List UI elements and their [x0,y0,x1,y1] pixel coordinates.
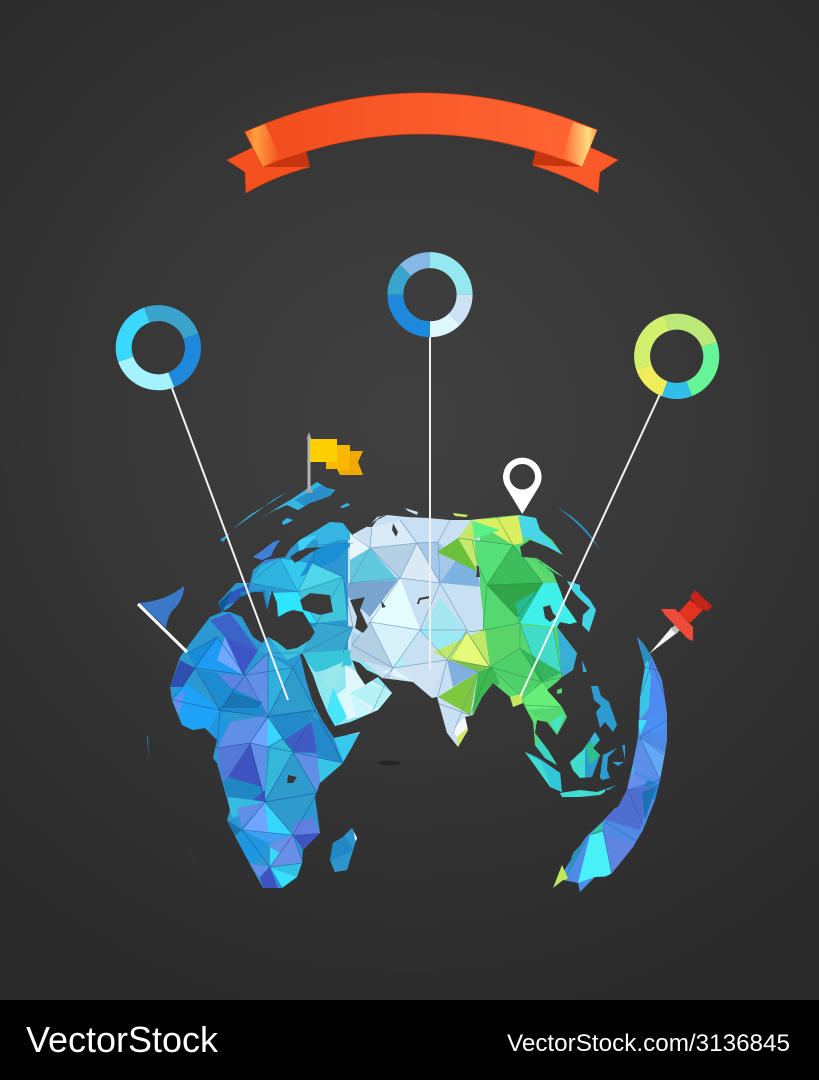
footer bar [0,1000,819,1080]
ribbon right tail [532,145,618,193]
Europe and Greenland facets [215,480,355,672]
icon: yellow flag [306,432,363,493]
icon: white map pin [503,458,542,514]
islands and Australia facets [525,635,668,888]
ground shadow [378,760,400,766]
red ribbon banner [227,93,618,193]
sliver: northeast arc [558,508,600,550]
leader line: right donut [520,392,661,697]
donut chart: centre [381,246,479,344]
low-poly world map [150,480,680,900]
footer image id: VectorStock.com/3136845 [507,1030,790,1057]
ribbon main band [245,93,597,167]
sliver: southwest arc [186,848,198,865]
leader line: centre donut [429,336,431,670]
sliver: west arc [147,736,149,760]
ribbon left tail [227,145,310,193]
donut chart: left [113,303,203,393]
icon: blue pennant flag [138,586,187,652]
globe mesh lines [172,517,667,888]
ribbon right shine [563,122,597,167]
central Asia pale facets [347,520,483,737]
ribbon left shine [245,124,280,167]
Africa facets [170,613,360,888]
Arabia facets [320,662,392,727]
ribbon left fold [263,150,310,167]
icon: red push pin [649,590,712,654]
donut chart: right [632,312,721,401]
region bases [170,482,355,888]
footer brand: VectorStock [26,1019,219,1060]
ribbon right fold [532,150,582,167]
small arc slivers [147,508,600,865]
leader line: left donut [172,388,288,700]
east Asia green facets [433,512,578,768]
